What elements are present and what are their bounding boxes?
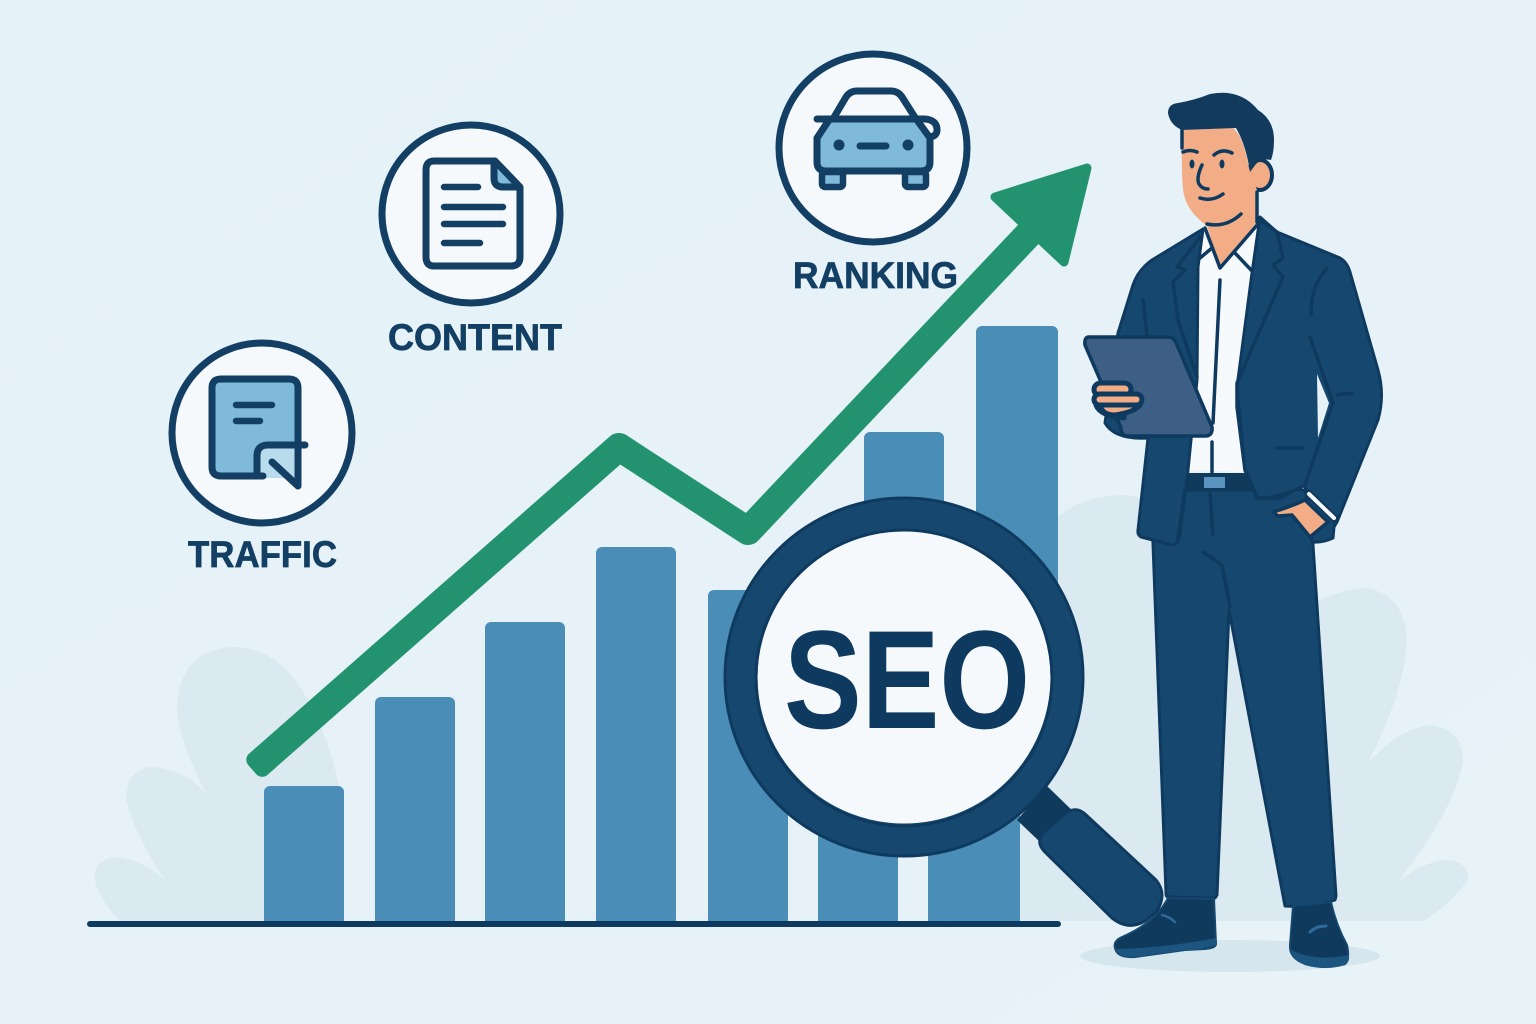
businessman [1085,93,1382,967]
left shoe [1115,898,1216,957]
icon: car [817,91,937,187]
ear [1248,160,1272,190]
label: traffic: TRAFFIC [188,534,337,575]
traffic circle [172,343,352,523]
icon: content page [426,161,520,266]
jacket left [1105,229,1203,545]
lens ring [741,514,1067,840]
chart baseline [87,921,1061,927]
tablet [1085,337,1212,436]
jacket details [1143,220,1352,538]
hair [1168,93,1274,172]
ranking circle [779,54,967,242]
collar [1200,224,1258,272]
lens text: SEO: SEO [784,601,1030,758]
icon: traffic document [212,379,305,486]
growth arrow [243,168,1087,780]
holding hand [1094,383,1142,418]
ranking item [779,54,967,296]
magnifying glass [725,498,1162,925]
arm gap [1317,374,1329,438]
content circle [382,125,560,303]
background foliage right [1015,495,1468,921]
ground shadow [1080,940,1380,972]
label: ranking: RANKING [793,255,958,296]
bar chart [264,326,1058,926]
trousers [1151,490,1336,906]
belt [1187,473,1252,491]
face features [1182,130,1257,225]
traffic item [172,343,352,575]
content item [382,125,562,358]
label: content: CONTENT [388,317,562,358]
handle [1017,786,1162,925]
jacket right [1237,217,1382,542]
right shoe [1290,902,1349,968]
face [1182,128,1257,268]
background foliage left [95,647,340,921]
pocket hand [1273,493,1335,537]
shirt [1188,224,1262,472]
